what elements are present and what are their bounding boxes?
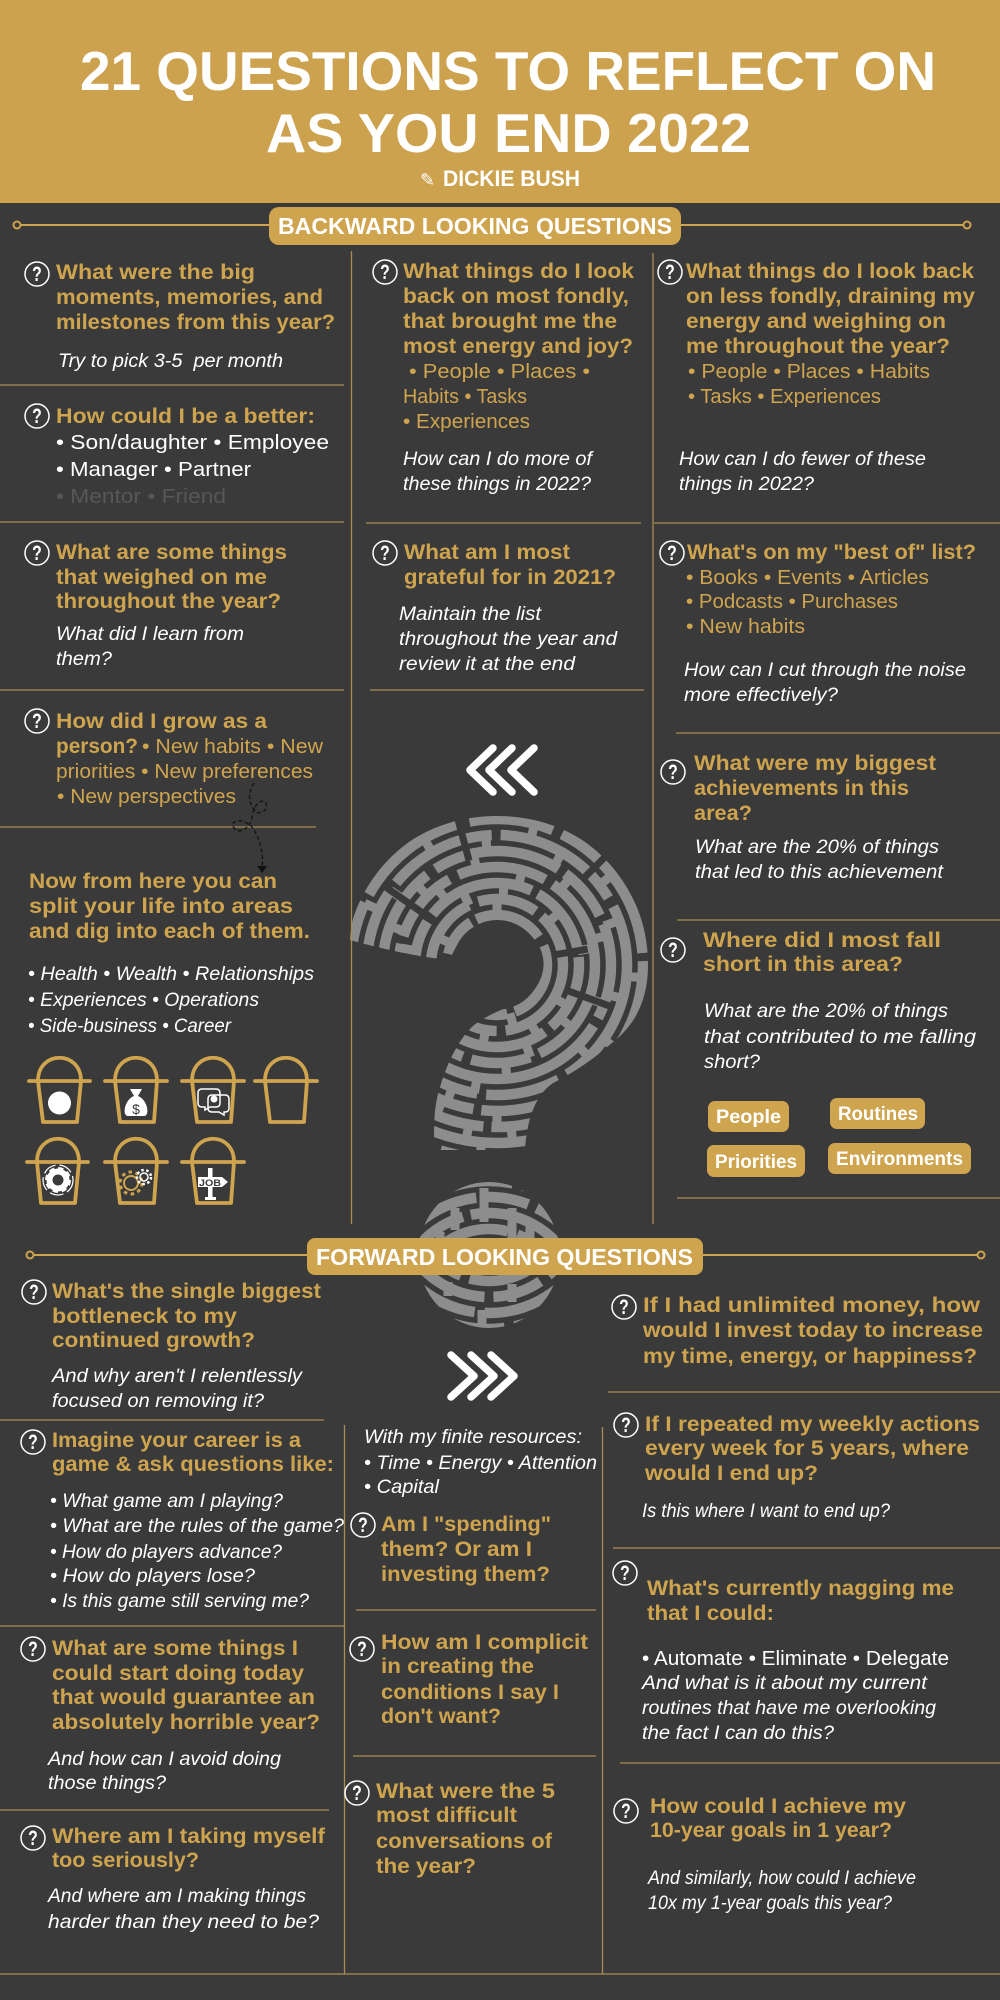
icon: question mark — [614, 1413, 638, 1437]
note — [679, 449, 926, 495]
category list: • People • Places • — [409, 361, 590, 383]
question list: • How do players lose? — [50, 1566, 255, 1587]
icon: question mark — [21, 1637, 45, 1661]
heading: What things do I look back — [686, 260, 974, 283]
text block: finite resources: • Time • Energy • Attention — [364, 1453, 597, 1474]
note: Maintain the list — [399, 604, 542, 625]
question: too seriously — [21, 1825, 326, 1933]
title: 21 QUESTIONS TO REFLECT ON — [80, 40, 936, 102]
heading: moments, memories, and — [56, 286, 323, 309]
heading — [644, 1413, 980, 1485]
heading: back on most fondly, — [403, 285, 629, 308]
icon: question mark — [373, 260, 397, 284]
heading: What are some things I — [52, 1637, 298, 1660]
bucket: wealth: $ — [132, 1101, 140, 1117]
heading — [52, 1825, 326, 1872]
note: these things in 2022? — [403, 474, 591, 495]
question: better — [25, 404, 329, 508]
heading: What's currently nagging me — [647, 1577, 954, 1600]
question: weekly actions — [614, 1413, 980, 1522]
icon: right chevrons — [451, 1355, 514, 1397]
note: that contributed to me falling — [704, 1027, 976, 1048]
icon: question mark — [373, 541, 397, 565]
icon: question mark — [661, 760, 685, 784]
icon: question mark: ? — [352, 1781, 362, 1805]
column dividers: forward section — [0, 1425, 1000, 1974]
note: And what is it about my current — [641, 1673, 928, 1694]
icon: dashed looping arrow — [233, 783, 267, 873]
heading: in creating the — [381, 1655, 534, 1678]
note: And why aren't I relentlessly — [51, 1366, 304, 1387]
icon: question mark: ? — [29, 1280, 39, 1304]
heading: If I had unlimited money, how — [643, 1294, 981, 1317]
heading: would I end up? — [644, 1462, 818, 1485]
icon: question mark — [25, 541, 49, 565]
heading: energy and weighing on — [686, 310, 946, 333]
heading: grateful for in 2021? — [404, 566, 616, 589]
note: harder than they need to be? — [48, 1912, 319, 1933]
bucket: health — [29, 1058, 90, 1122]
note: things in 2022? — [679, 474, 814, 495]
icon: question mark — [661, 938, 685, 962]
title: AS YOU END 2022 — [266, 102, 751, 164]
heading: What were my biggest — [694, 752, 936, 775]
heading: don't want? — [381, 1705, 501, 1728]
icon: question mark: ? — [32, 262, 42, 286]
bucket: wealth — [105, 1058, 167, 1122]
note: short? — [704, 1052, 760, 1073]
note — [704, 1001, 976, 1073]
heading — [376, 1780, 555, 1878]
note: Is this where I want to end up? — [642, 1501, 890, 1522]
heading — [703, 929, 941, 976]
question: 10-year goals — [614, 1795, 916, 1914]
icon: question mark — [21, 1826, 45, 1850]
note — [399, 604, 619, 675]
note — [647, 1868, 916, 1914]
heading: most energy and joy? — [403, 335, 633, 358]
icon: question mark — [658, 260, 682, 284]
heading — [403, 260, 634, 358]
heading: split your life into areas — [29, 895, 293, 918]
text block: split your life — [28, 870, 315, 1037]
note: that led to this achievement — [695, 862, 944, 883]
role list: • Son/daughter • Employee — [56, 432, 329, 454]
icon: question mark: ? — [619, 1295, 629, 1319]
question: fall short — [661, 929, 976, 1177]
heading: Imagine your career is a — [52, 1429, 301, 1452]
icon: question mark: ? — [667, 541, 677, 565]
question: most fondly — [373, 260, 634, 495]
heading: bottleneck to my — [52, 1305, 237, 1328]
heading: conditions I say I — [381, 1681, 559, 1704]
question: best of list — [660, 541, 976, 706]
question: grateful — [373, 541, 619, 675]
icon: question mark: ? — [620, 1561, 630, 1585]
action list: • Automate • Eliminate • Delegate — [642, 1648, 949, 1670]
heading: throughout the year? — [56, 590, 281, 613]
heading and list: • New habits • New — [142, 736, 324, 758]
question: nagging — [613, 1561, 954, 1744]
heading: What are some things — [56, 541, 287, 564]
note: them? — [56, 649, 112, 670]
note — [47, 1749, 281, 1794]
heading — [686, 260, 975, 358]
section banner: forward looking questions: FORWARD LOOKING QUESTIONS — [316, 1244, 693, 1270]
icon: question mark: ? — [32, 541, 42, 565]
role list: • Mentor • Friend — [56, 486, 226, 508]
question list: • Is this game still serving me? — [50, 1591, 309, 1612]
heading: continued growth? — [52, 1329, 255, 1352]
heading: game & ask questions like: — [52, 1453, 334, 1476]
heading: that I could: — [647, 1602, 774, 1625]
text block: finite resources: • Capital — [364, 1477, 440, 1498]
heading — [52, 1280, 321, 1352]
role list: • Manager • Partner — [56, 459, 251, 481]
heading: every week for 5 years, where — [645, 1437, 969, 1460]
heading: Where am I taking myself — [52, 1825, 326, 1848]
icon: question mark: ? — [32, 709, 42, 733]
heading: most difficult — [376, 1804, 517, 1827]
category list: • Experiences — [403, 411, 530, 433]
tag: priorities — [707, 1145, 805, 1177]
heading: investing them? — [381, 1563, 550, 1586]
icon: question mark: ? — [665, 260, 675, 284]
note: focused on removing it? — [52, 1391, 264, 1412]
tag: priorities: Priorities — [715, 1152, 797, 1173]
category list: • Podcasts • Purchases — [686, 591, 898, 613]
question: spending or investing — [351, 1513, 551, 1586]
heading: would I invest today to increase — [642, 1319, 983, 1342]
life area list — [28, 964, 315, 1037]
question: unlimited money — [612, 1294, 983, 1368]
note: How can I do more of — [403, 449, 594, 470]
heading and list: priorities • New preferences — [56, 761, 313, 783]
heading: that would guarantee an — [52, 1686, 315, 1709]
icon: question mark — [345, 1781, 369, 1805]
author byline: ✎ — [420, 170, 435, 191]
note — [403, 449, 594, 495]
heading: What's the single biggest — [52, 1280, 321, 1303]
life area list: • Health • Wealth • Relationships — [28, 964, 315, 985]
category list: • People • Places • Habits — [688, 361, 930, 383]
note: more effectively? — [684, 685, 838, 706]
note: How can I do fewer of these — [679, 449, 926, 470]
heading: If I repeated my weekly actions — [645, 1413, 980, 1436]
heading: 10-year goals in 1 year? — [650, 1819, 892, 1842]
icon: question mark — [22, 1280, 46, 1304]
life area list: • Side-business • Career — [28, 1016, 232, 1037]
bucket: experiences — [255, 1058, 317, 1122]
note: And how can I avoid doing — [47, 1749, 281, 1770]
question: biggest achievements — [661, 752, 944, 883]
heading: Am I "spending" — [381, 1513, 551, 1536]
tag: people: People — [716, 1107, 781, 1128]
icon: question mark — [25, 262, 49, 286]
title — [80, 40, 936, 164]
note: Try to pick 3-5 per month — [58, 351, 283, 372]
heading — [647, 1577, 954, 1625]
note: What are the 20% of things — [695, 837, 940, 858]
icon: question mark — [612, 1295, 636, 1319]
heading and list: person? — [56, 735, 138, 758]
note — [56, 624, 244, 670]
tag: routines — [830, 1098, 925, 1129]
heading: me throughout the year? — [686, 335, 950, 358]
icon: question mark — [350, 1637, 374, 1661]
heading: How could I be a better: — [56, 405, 315, 428]
heading — [650, 1795, 906, 1842]
note: throughout the year and — [399, 629, 619, 650]
note: review it at the end — [399, 654, 577, 675]
note: What are the 20% of things — [704, 1001, 949, 1022]
heading and list: How did I grow as a — [56, 710, 267, 733]
note: the fact I can do this? — [642, 1723, 834, 1744]
question list: • What game am I playing? — [50, 1491, 283, 1512]
question: big moments — [25, 261, 335, 372]
icon: question mark: ? — [32, 404, 42, 428]
section banner: backward looking questions — [14, 207, 970, 245]
bucket: career: JOB — [199, 1178, 221, 1189]
heading and list: • New perspectives — [57, 786, 236, 808]
category list — [686, 567, 929, 638]
heading: could start doing today — [52, 1662, 304, 1685]
heading: them? Or am I — [381, 1538, 532, 1561]
category list — [688, 361, 930, 408]
heading — [29, 870, 310, 943]
icon: question mark: ? — [621, 1799, 631, 1823]
maze question mark — [350, 816, 648, 1328]
icon: question mark: ? — [358, 1513, 368, 1537]
question list: • How do players advance? — [50, 1542, 282, 1563]
heading: too seriously? — [52, 1849, 199, 1872]
heading — [381, 1631, 588, 1728]
note: routines that have me overlooking — [642, 1698, 936, 1719]
question: grow as a person — [25, 709, 324, 808]
category list: Habits • Tasks — [403, 386, 527, 408]
icon: question mark: ? — [380, 260, 390, 284]
heading: What am I most — [404, 541, 570, 564]
category list — [403, 361, 590, 433]
text block: finite resources: With my finite resources: — [364, 1427, 582, 1448]
icon: question mark — [613, 1561, 637, 1585]
life area list: • Experiences • Operations — [28, 990, 260, 1011]
icon: question mark — [660, 541, 684, 565]
bucket: operations — [27, 1139, 88, 1203]
question: less fondly — [658, 260, 975, 495]
heading — [404, 541, 616, 589]
note: How can I cut through the noise — [684, 660, 966, 681]
icon: question mark — [351, 1513, 375, 1537]
heading — [56, 261, 335, 334]
question: complicit — [350, 1631, 588, 1728]
heading — [52, 1429, 334, 1476]
category list: • Tasks • Experiences — [688, 386, 881, 408]
tag: environments — [828, 1143, 971, 1174]
heading: on less fondly, draining my — [686, 285, 975, 308]
note: And similarly, how could I achieve — [647, 1868, 916, 1889]
heading: that weighed on me — [56, 566, 267, 589]
heading: short in this area? — [703, 953, 903, 976]
heading: Now from here you can — [29, 870, 277, 893]
note — [695, 837, 944, 883]
heading: How am I complicit — [381, 1631, 588, 1654]
bucket: career — [182, 1139, 244, 1203]
heading: and dig into each of them. — [29, 920, 310, 943]
category list: • New habits — [686, 616, 805, 638]
heading: What things do I look — [403, 260, 634, 283]
heading: What were the big — [56, 261, 255, 284]
heading: area? — [694, 802, 752, 825]
tag: environments: Environments — [836, 1149, 963, 1170]
column dividers: backward section — [352, 251, 653, 1224]
maze hook and stem — [350, 816, 648, 1150]
icon: question mark — [25, 404, 49, 428]
heading — [694, 752, 936, 825]
section banner: backward looking questions: BACKWARD LOOKING QUESTIONS — [278, 213, 672, 239]
icon: question mark: ? — [668, 760, 678, 784]
maze dot — [420, 1182, 558, 1328]
icon: question mark — [25, 709, 49, 733]
note: those things? — [48, 1773, 166, 1794]
icon: question mark: ? — [28, 1430, 38, 1454]
tag: routines: Routines — [838, 1104, 918, 1125]
category list: • Books • Events • Articles — [686, 567, 929, 589]
heading — [381, 1513, 551, 1586]
heading: absolutely horrible year? — [52, 1711, 320, 1734]
icon: question mark: ? — [28, 1637, 38, 1661]
note: What did I learn from — [56, 624, 244, 645]
heading: What were the 5 — [376, 1780, 555, 1803]
role list — [56, 432, 329, 508]
heading and list — [56, 710, 324, 808]
heading: my time, energy, or happiness? — [643, 1345, 977, 1368]
icon: question mark: ? — [668, 938, 678, 962]
question: difficult conversations — [345, 1780, 555, 1878]
heading — [52, 1637, 320, 1734]
heading — [56, 541, 287, 613]
icon: question mark — [21, 1430, 45, 1454]
question list — [50, 1491, 344, 1612]
bucket: relationships — [182, 1058, 244, 1122]
heading: that brought me the — [403, 310, 617, 333]
question: horrible year — [21, 1637, 320, 1794]
icon: left chevrons — [470, 748, 534, 792]
bucket icons — [27, 1058, 317, 1203]
heading: Where did I most fall — [703, 929, 941, 952]
icon: question mark: ? — [621, 1413, 631, 1437]
question: career as a game — [21, 1429, 344, 1612]
tag: people — [708, 1101, 789, 1132]
note — [641, 1673, 936, 1744]
note: 10x my 1-year goals this year? — [648, 1893, 892, 1914]
icon: question mark: ? — [28, 1826, 38, 1850]
heading: How could I achieve my — [650, 1795, 906, 1818]
question list: • What are the rules of the game? — [50, 1516, 344, 1537]
heading: conversations of — [376, 1830, 553, 1853]
icon: question mark: ? — [357, 1637, 367, 1661]
question: biggest bottleneck — [22, 1280, 321, 1412]
heading: the year? — [376, 1855, 476, 1878]
heading — [642, 1294, 983, 1368]
note — [51, 1366, 304, 1412]
icon: question mark — [614, 1799, 638, 1823]
author byline: DICKIE BUSH — [443, 166, 580, 191]
note — [684, 660, 966, 706]
text block: finite resources — [364, 1427, 597, 1498]
heading: achievements in this — [694, 777, 909, 800]
note — [47, 1886, 319, 1933]
header band — [0, 0, 1000, 203]
heading: milestones from this year? — [56, 311, 335, 334]
section banner: forward looking questions — [26, 1238, 984, 1275]
icon: question mark: ? — [380, 541, 390, 565]
bucket: side business — [105, 1139, 167, 1203]
note: And where am I making things — [47, 1886, 306, 1907]
heading: What's on my "best of" list? — [687, 541, 976, 564]
question: weighed on me — [25, 541, 287, 670]
